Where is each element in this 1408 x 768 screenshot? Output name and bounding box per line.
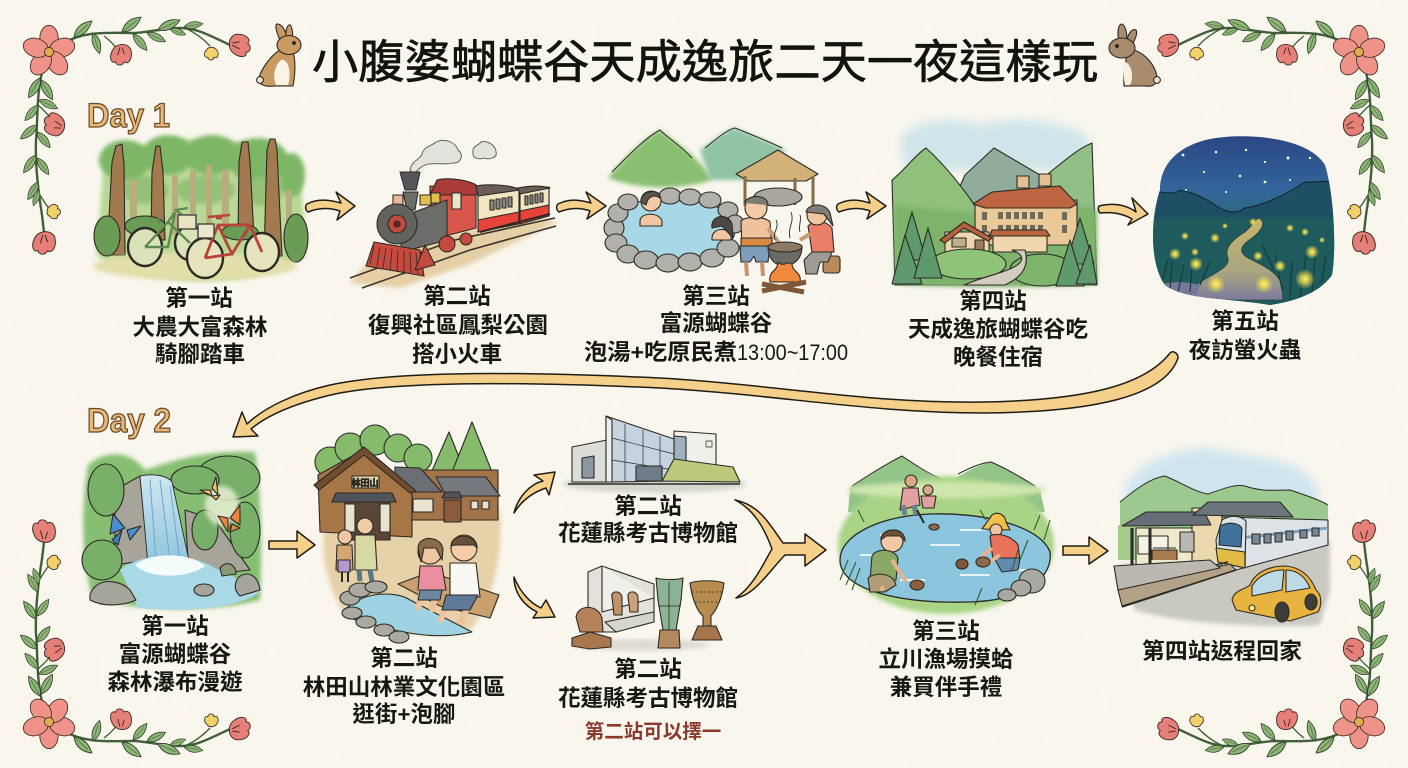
- panel: clam digging pond: [838, 456, 1054, 614]
- panel: Lintianshan forestry village: 林田山: [351, 477, 379, 488]
- caption: day 1 stop 5: 第五站: [1211, 309, 1279, 334]
- caption: day 1 stop 3: 13:00~17:00: [737, 340, 848, 365]
- heading: Day 2: Day 2: [87, 402, 171, 440]
- caption: day 2 stop 3: 第三站: [912, 619, 980, 644]
- icon: right rabbit: [1109, 24, 1160, 86]
- caption: museum option two: 花蓮縣考古博物館: [558, 685, 738, 711]
- seated pair: [418, 540, 442, 564]
- caption: day 1 stop 3: 富源蝴蝶谷: [660, 310, 772, 336]
- panel: steam train: [350, 140, 558, 288]
- icon: left rabbit: [257, 24, 301, 86]
- heading: Day 1: Day 1: [87, 97, 170, 135]
- arrow: stop 4 to stop 5: [1098, 198, 1148, 225]
- arrow: pond to station: [1063, 537, 1108, 564]
- woman in hat: [982, 513, 1010, 530]
- caption: day 2 stop 1: 第一站: [141, 614, 209, 639]
- floral corner top-left: [18, 14, 252, 254]
- fire: [770, 262, 800, 282]
- walking couple: [338, 530, 352, 544]
- caption: day 1 stop 5: 夜訪螢火蟲: [1189, 337, 1302, 363]
- panel: fireflies at night: [1150, 134, 1336, 306]
- panel: hot spring and cooking: [604, 128, 840, 292]
- arrow: stop 3 to stop 4: [837, 192, 886, 219]
- panel: forest waterfall: [82, 452, 262, 610]
- arrow: stop 2 to stop 3: [557, 192, 606, 219]
- panel: forest and bicycles: [93, 135, 308, 281]
- red bike: [187, 215, 279, 278]
- caption: day 1 stop 2: 第二站: [423, 284, 491, 309]
- caption: day 2 stop 2: 林田山林業文化園區: [303, 675, 505, 700]
- panel: Lintianshan forestry village: [314, 422, 501, 643]
- note: choose one of the stop 2 options: 第二站可以擇一: [585, 720, 721, 743]
- caption: day 2 stop 2: 逛街+泡腳: [352, 702, 456, 727]
- caption: day 1 stop 4: 天成逸旅蝴蝶谷吃: [908, 317, 1088, 342]
- caption: day 2 stop 4: 第四站返程回家: [1142, 638, 1302, 664]
- caption: museum option one: 第二站: [614, 494, 682, 519]
- butterfly blue: [110, 514, 141, 545]
- foot bath: [345, 594, 472, 636]
- caption: day 2 stop 1: 富源蝴蝶谷: [119, 641, 231, 667]
- caption: day 1 stop 3: 第三站: [682, 284, 750, 309]
- panel: archaeology museum building: [563, 416, 747, 493]
- floral corner bottom-right: [1156, 520, 1390, 760]
- caption: day 2 stop 2: 第二站: [370, 646, 438, 671]
- car: [1232, 566, 1321, 621]
- panel: mountain hotel: [892, 120, 1097, 287]
- arrow: split up to museum: [514, 472, 555, 513]
- arrow: stop 1 to stop 2: [306, 192, 355, 220]
- caption: day 1 stop 4: 第四站: [959, 289, 1027, 314]
- caption: day 1 stop 3: 泡湯+吃原民煮: [584, 340, 737, 365]
- hut: [736, 150, 818, 181]
- butterfly yellow: [200, 477, 220, 500]
- caption: day 1 stop 2: 復興社區鳳梨公園: [368, 313, 548, 338]
- caption: day 1 stop 3: [584, 284, 848, 365]
- caption: day 1 stop 1: 第一站: [165, 286, 233, 311]
- pot: [768, 246, 802, 266]
- caption: day 1 stop 4: 晚餐住宿: [953, 344, 1043, 370]
- floral corner top-right: [1156, 14, 1390, 254]
- arrow: day 2 stop 1 to stop 2: [269, 531, 315, 558]
- caption: museum option two: 第二站: [614, 657, 682, 682]
- caption: day 1 stop 2: 搭小火車: [412, 342, 502, 367]
- arrow: split down to relics: [514, 577, 555, 618]
- caption: day 2 stop 1: 森林瀑布漫遊: [107, 670, 243, 695]
- far pair: [905, 475, 917, 487]
- caption: day 2 stop 3: 兼買伴手禮: [890, 675, 1002, 700]
- caption: day 2 stop 3: 立川漁場摸蛤: [878, 646, 1014, 672]
- smoke: [410, 140, 496, 173]
- caption: day 1 stop 1: 騎腳踏車: [155, 342, 245, 367]
- man: [741, 217, 772, 250]
- arrow: merge to pond: [735, 500, 826, 598]
- butterfly orange: [218, 505, 240, 532]
- title: 小腹婆蝴蝶谷天成逸旅二天一夜這樣玩: [312, 36, 1098, 88]
- panel: train station and car: [1114, 447, 1330, 626]
- floral corner bottom-left: [18, 520, 252, 760]
- caption: day 1 stop 1: 大農大富森林: [132, 314, 268, 340]
- rocks: [1019, 569, 1045, 593]
- woman: [823, 256, 840, 273]
- panel: museum relics: [570, 566, 724, 651]
- arrow: long curve from Day 1 to Day 2: [233, 352, 1178, 437]
- caption: museum option one: 花蓮縣考古博物館: [558, 520, 738, 546]
- boy: [881, 530, 903, 552]
- green bike: [128, 208, 205, 266]
